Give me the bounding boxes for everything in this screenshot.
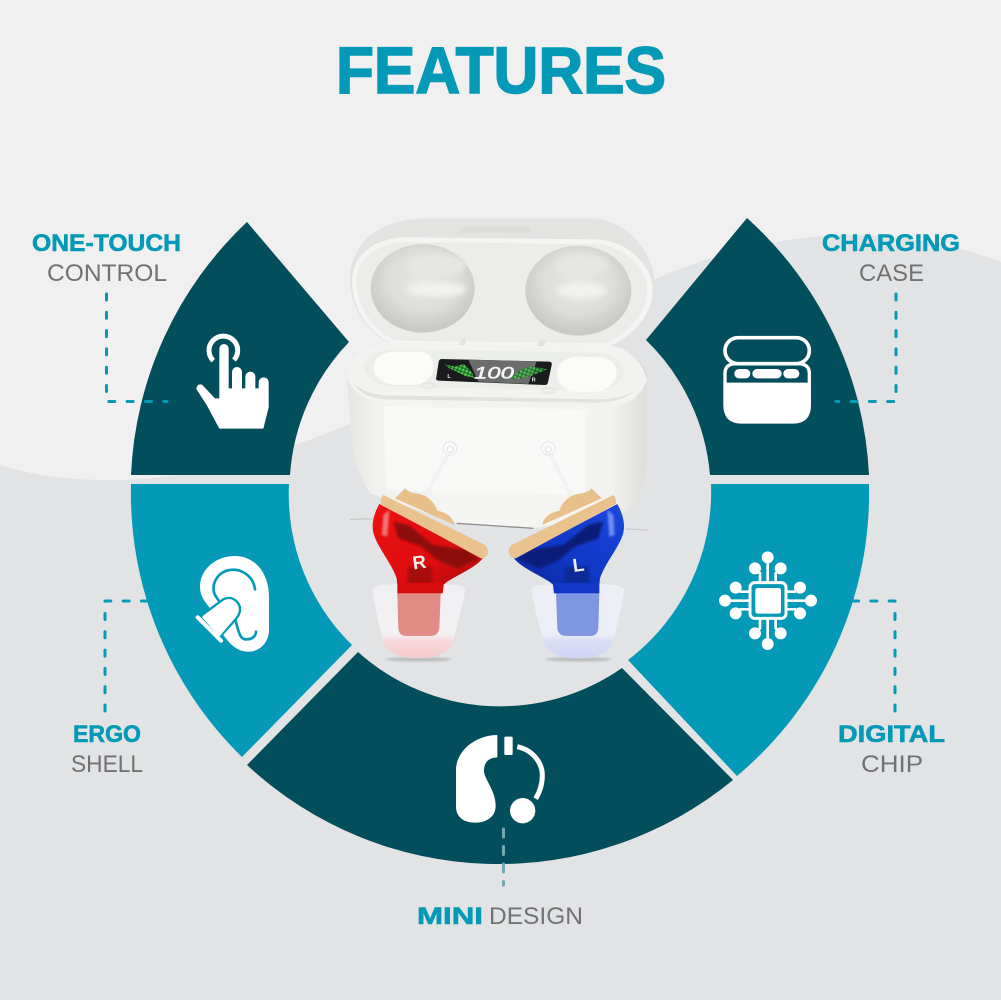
label: ergo shell: SHELL <box>71 751 143 778</box>
label: ergo shell <box>71 721 143 778</box>
segment: ergo shell <box>131 484 352 757</box>
title: FEATURES <box>336 33 666 107</box>
label: one-touch control: CONTROL <box>47 260 167 287</box>
blue hearing aid: L <box>571 554 585 576</box>
segment: one-touch control <box>131 222 349 475</box>
segment: mini design <box>247 652 733 864</box>
case display: 100 <box>474 363 515 382</box>
label: charging case: CHARGING <box>822 230 960 257</box>
label: digital chip: CHIP <box>861 751 923 778</box>
label: charging case: CASE <box>859 260 924 287</box>
label: mini design: DESIGN <box>489 903 583 930</box>
red hearing aid <box>373 442 488 661</box>
segment: charging case <box>646 218 869 475</box>
icon: charging case <box>723 338 811 424</box>
case display: L <box>447 374 451 380</box>
product: charging case <box>347 218 655 528</box>
case base <box>347 338 647 528</box>
label: one-touch control <box>32 230 181 287</box>
icon: ear with plug <box>198 556 269 652</box>
label: mini design <box>417 903 583 930</box>
case display: R <box>532 378 536 384</box>
red hearing aid: R <box>411 551 428 573</box>
background wave <box>0 235 1001 1000</box>
label: charging case <box>822 230 960 287</box>
dashed connectors <box>105 294 896 885</box>
icon: mini hearing aid <box>456 735 542 823</box>
icon: touch hand <box>196 336 269 429</box>
case shadow lines <box>350 519 648 530</box>
blue hearing aid <box>509 442 624 661</box>
label: digital chip: DIGITAL <box>838 721 945 748</box>
label: mini design: MINI <box>417 903 483 930</box>
label: digital chip <box>838 721 945 778</box>
case display <box>436 359 552 385</box>
label: one-touch control: ONE-TOUCH <box>32 230 181 257</box>
segment: digital chip <box>628 484 869 776</box>
case lid <box>350 218 655 348</box>
label: ergo shell: ERGO <box>73 721 141 748</box>
icon: digital chip <box>719 551 817 650</box>
product: hearing aids <box>350 442 648 661</box>
